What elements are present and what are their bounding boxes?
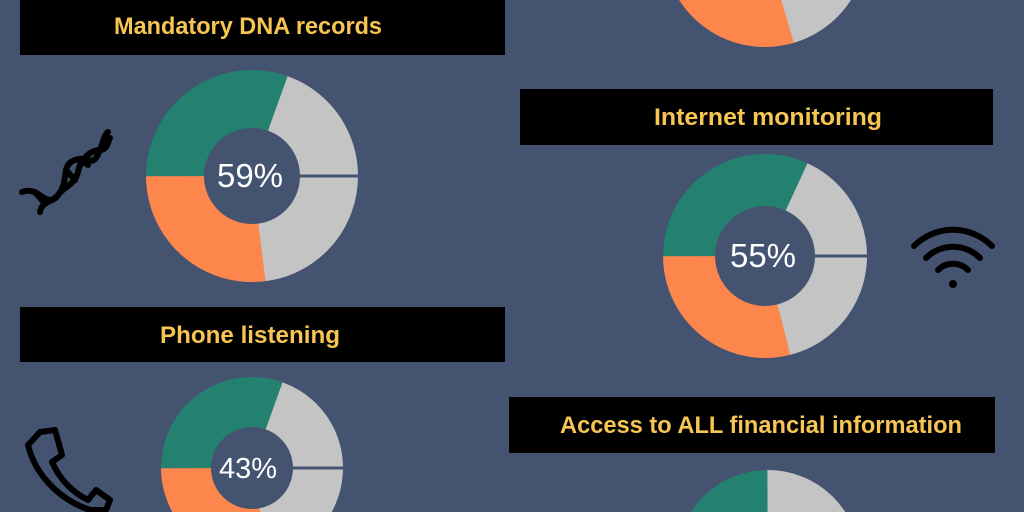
header: Phone listening	[20, 307, 505, 362]
donut: Phone 43%	[167, 383, 343, 512]
donut: Phone 43%: 43%	[219, 453, 277, 485]
donut: DNA 59%	[153, 77, 358, 275]
header: Mandatory DNA records	[20, 0, 505, 55]
icon: DNA helix	[22, 132, 110, 212]
donut: Internet 55%: 55%	[730, 237, 796, 274]
header: Access to ALL financial information: Access to ALL financial information	[560, 412, 962, 439]
donut: Internet 55%	[664, 155, 868, 357]
icon: wifi	[914, 230, 992, 288]
header: Phone listening: Phone listening	[160, 322, 340, 349]
header: Mandatory DNA records: Mandatory DNA records	[114, 13, 382, 40]
header: Access to ALL financial information	[509, 397, 995, 453]
donut: top (cut off)	[671, 0, 859, 39]
donut: financial (cut off)	[702, 496, 834, 512]
header: Internet monitoring: Internet monitoring	[654, 104, 882, 131]
donut: DNA 59%: 59%	[217, 157, 283, 194]
icon: phone	[28, 430, 110, 510]
header: Internet monitoring	[520, 89, 993, 145]
